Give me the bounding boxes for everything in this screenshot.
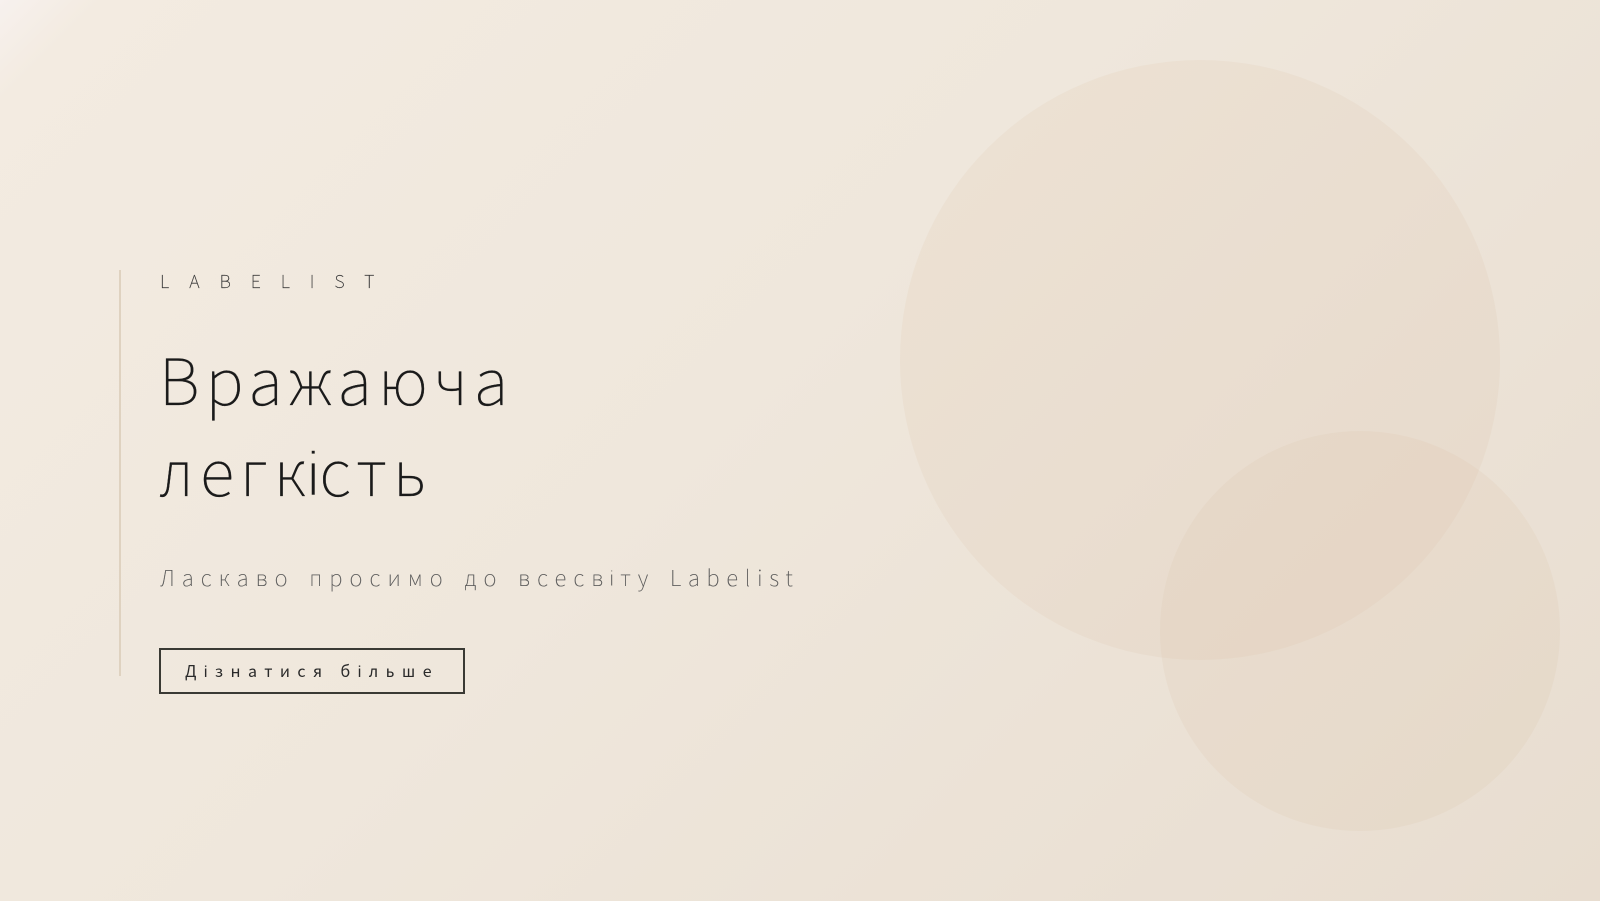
subtitle: Ласкаво просимо до всесвіту Labelist: [160, 561, 800, 593]
button: [159, 648, 465, 694]
title: [159, 332, 514, 515]
title: легкість: [159, 423, 432, 515]
title: Вражаюча: [159, 332, 514, 424]
brand label: LABELIST: [160, 268, 394, 294]
decorative circle: small: [1160, 431, 1560, 831]
vertical accent line: [119, 270, 121, 676]
decorative circle: large: [900, 60, 1500, 660]
button: Дізнатися більше: [185, 658, 439, 682]
